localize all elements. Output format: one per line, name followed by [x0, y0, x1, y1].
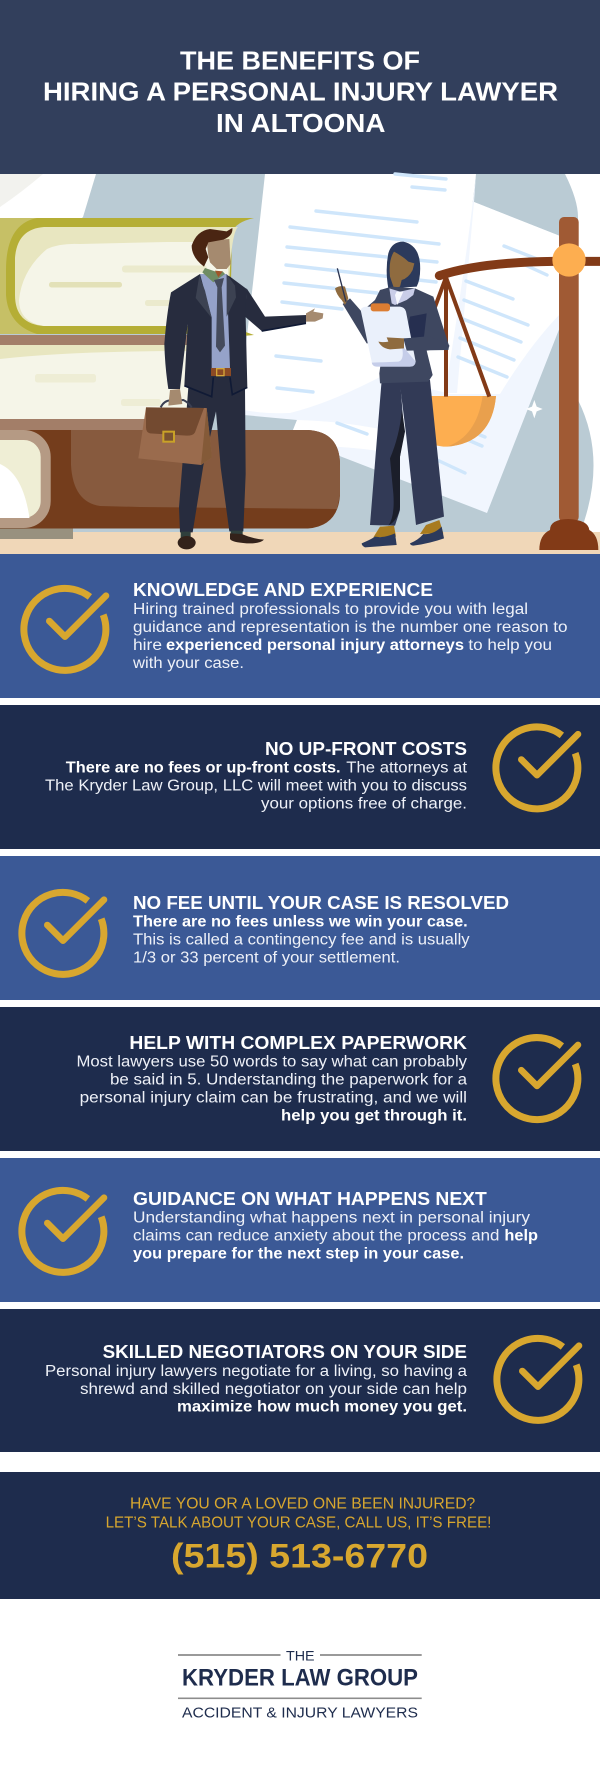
- call to action text: LET’S TALK ABOUT YOUR CASE, CALL US, IT’S FREE!: [106, 1514, 491, 1531]
- logo: The Kryder Law Group: ACCIDENT & INJURY LAWYERS: [182, 1704, 418, 1721]
- body text: 1/3 or 33 percent of your settlement.: [133, 950, 400, 967]
- icon: gold check: [22, 1190, 104, 1272]
- body text: Understanding what happens next in personal injury: [133, 1210, 530, 1227]
- phone number: (515) 513-6770: [171, 1537, 428, 1575]
- panel: no fee until resolved: [0, 856, 600, 1000]
- body text: with your case.: [132, 655, 244, 672]
- body text: guidance and representation is the number one reason to: [133, 619, 568, 636]
- body text: [45, 760, 468, 813]
- bottom brown book: [0, 430, 340, 528]
- logo: The Kryder Law Group: THE: [286, 1648, 315, 1664]
- heading: GUIDANCE ON WHAT HAPPENS NEXT: [133, 1188, 488, 1209]
- call to action text: [106, 1495, 491, 1531]
- call to action text: HAVE YOU OR A LOVED ONE BEEN INJURED?: [130, 1495, 475, 1512]
- title: HIRING A PERSONAL INJURY LAWYER: [43, 77, 558, 107]
- top olive book: [0, 218, 254, 336]
- body text: The Kryder Law Group, LLC will meet with you to discuss: [45, 778, 467, 795]
- icon: gold check: [497, 1338, 579, 1420]
- body text: [133, 914, 470, 967]
- body text: shrewd and skilled negotiator on your side can help: [80, 1381, 467, 1398]
- heading: SKILLED NEGOTIATORS ON YOUR SIDE: [103, 1341, 467, 1362]
- body text: experienced personal injury attorneys: [166, 637, 464, 654]
- logo: The Kryder Law Group: KRYDER LAW GROUP: [182, 1664, 418, 1691]
- logo: The Kryder Law Group: [178, 1648, 422, 1721]
- body text: [76, 1054, 467, 1125]
- stacked middle book: [0, 335, 190, 430]
- body text: help: [504, 1228, 538, 1245]
- floor: [0, 532, 600, 554]
- body text: This is called a contingency fee and is usually: [133, 932, 470, 949]
- slate backdrop: [0, 174, 594, 533]
- panel: skilled negotiators: [0, 1309, 600, 1452]
- panel: complex paperwork: [0, 1007, 600, 1151]
- illustration: lawyers with books and scale: [0, 174, 600, 554]
- body text: [45, 1363, 467, 1416]
- heading: NO FEE UNTIL YOUR CASE IS RESOLVED: [133, 892, 509, 913]
- title: THE BENEFITS OF: [180, 46, 420, 76]
- icon: gold check: [24, 588, 106, 670]
- woman with clipboard: [335, 242, 449, 547]
- body text: maximize how much money you get.: [177, 1399, 467, 1416]
- man with briefcase: [138, 228, 323, 549]
- body text: be said in 5. Understanding the paperwork for a: [110, 1072, 467, 1089]
- heading: NO UP-FRONT COSTS: [265, 738, 467, 759]
- header banner: [0, 0, 600, 174]
- document sheets: [244, 174, 560, 513]
- body text: help you get through it.: [281, 1108, 467, 1125]
- body text: There are no fees unless we win your case.: [133, 914, 468, 931]
- body text: [133, 1210, 538, 1263]
- heading: HELP WITH COMPLEX PAPERWORK: [129, 1032, 468, 1053]
- heading: KNOWLEDGE AND EXPERIENCE: [133, 579, 433, 600]
- call to action panel: [0, 1472, 600, 1599]
- balance scale: [420, 217, 600, 550]
- body text: hire: [133, 637, 162, 654]
- title: IN ALTOONA: [216, 108, 386, 138]
- body text: you prepare for the next step in your case.: [133, 1246, 464, 1263]
- panel: guidance on what happens next: [0, 1158, 600, 1302]
- body text: your options free of charge.: [261, 796, 467, 813]
- body text: claims can reduce anxiety about the process and: [133, 1228, 499, 1245]
- title: [43, 46, 558, 138]
- body text: There are no fees or up-front costs.: [66, 760, 341, 777]
- body text: The attorneys at: [346, 760, 468, 777]
- icon: gold check: [22, 892, 104, 974]
- panel: no up-front costs: [0, 705, 600, 849]
- icon: gold check: [496, 727, 578, 809]
- body text: Hiring trained professionals to provide you with legal: [133, 601, 528, 618]
- icon: gold check: [496, 1038, 578, 1120]
- body text: Most lawyers use 50 words to say what can probably: [76, 1054, 467, 1071]
- body text: [132, 601, 568, 672]
- body text: Personal injury lawyers negotiate for a living, so having a: [45, 1363, 467, 1380]
- body text: to help you: [468, 637, 552, 654]
- panel: knowledge and experience: [0, 554, 600, 698]
- body text: personal injury claim can be frustrating, and we will: [80, 1090, 467, 1107]
